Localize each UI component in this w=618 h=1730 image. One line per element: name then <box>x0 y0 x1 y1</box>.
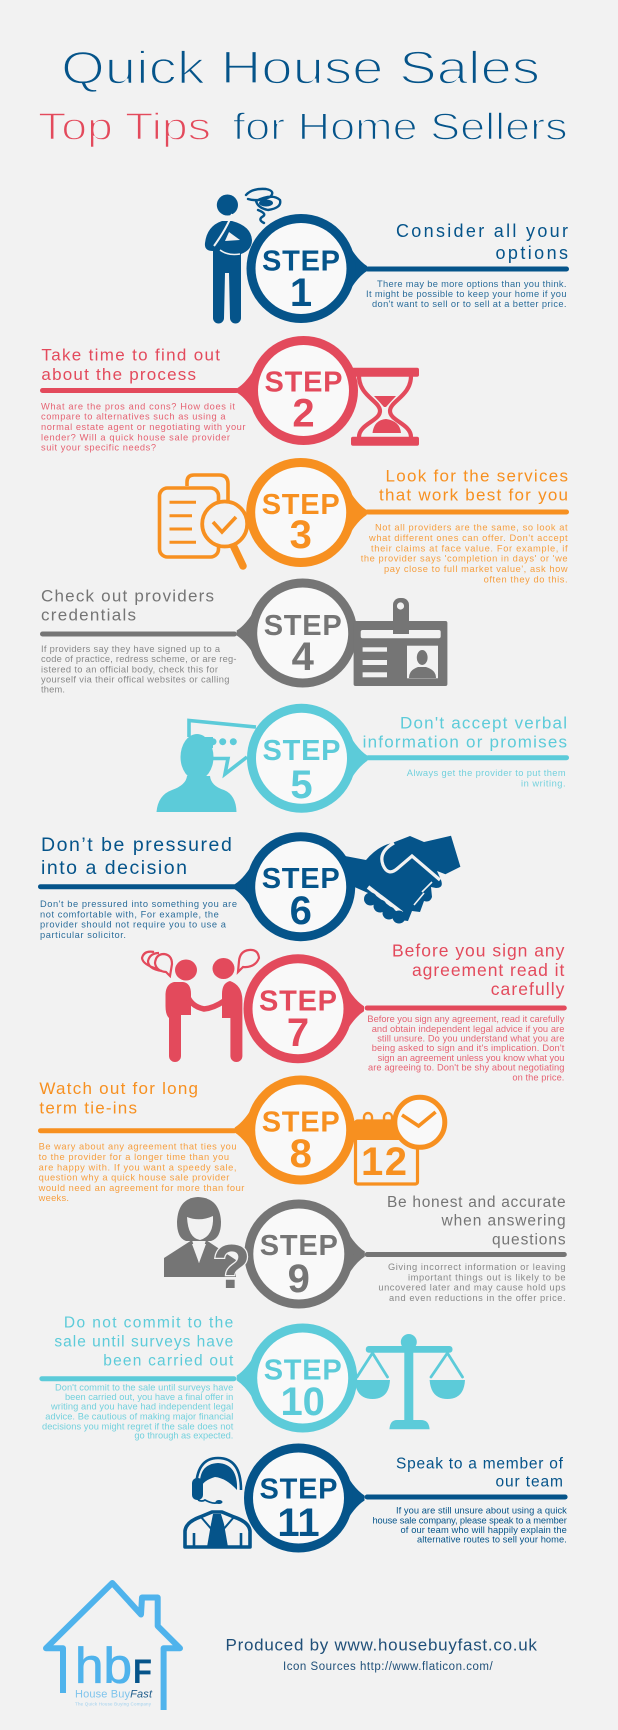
title line 2: for Home Sellers <box>233 106 568 148</box>
step 10 badge: STEP <box>264 1354 342 1386</box>
step 7 heading <box>392 941 565 999</box>
step 9 body: important things out is likely to be <box>408 1272 566 1282</box>
step 4 heading: Check out providers <box>41 587 214 606</box>
step 5 heading <box>363 713 567 752</box>
step 11 body: If you are still unsure about using a quick <box>396 1506 567 1516</box>
step 11 body: of our team who will happily explain the <box>400 1525 567 1535</box>
logo house outline <box>46 1583 180 1710</box>
step 2 heading: about the process <box>41 365 196 384</box>
step 8 body: to the provider for a longer time than you <box>39 1152 229 1162</box>
step 8 badge <box>38 1076 355 1184</box>
logo letters hbF: hb <box>75 1638 132 1694</box>
step 10 body: advice. Be cautious of making major financial <box>45 1411 233 1421</box>
step 8 panel <box>38 1076 445 1203</box>
icon: thinking person <box>205 189 280 324</box>
step 11 heading: Speak to a member of <box>396 1455 564 1472</box>
step 7 badge: STEP <box>259 986 337 1018</box>
step 3 body: pay close to full market value', ask how <box>384 564 568 574</box>
step 6 badge: 6 <box>290 889 312 933</box>
step 7 heading: agreement read it <box>412 960 565 980</box>
step 9 heading <box>387 1194 566 1248</box>
icon: two people talking <box>142 950 259 1062</box>
step 1 heading: options <box>496 243 568 263</box>
step 7 body: still unsure. Do you understand what you are <box>377 1033 564 1043</box>
footer credits <box>226 1636 537 1673</box>
step 3 body: often they do this. <box>484 574 568 584</box>
step 3 body: the provider says 'completion in days' or 'we <box>361 554 568 564</box>
step 7 body: are agreeing to. Don't be shy about negotiating <box>368 1062 564 1072</box>
step 10 badge <box>39 1324 357 1432</box>
step 7 body: being asked to sign and it's implication. Don't <box>372 1043 565 1053</box>
step 6 panel <box>38 832 460 941</box>
step 5 body <box>407 768 566 789</box>
step 2 body: lender? Will a quick house sale provider <box>41 432 230 442</box>
title line 2 <box>38 106 568 148</box>
step 9 badge <box>244 1200 567 1308</box>
step 8 body: question why a quick house sale provider <box>39 1173 229 1183</box>
step 2 heading: Take time to find out <box>41 346 220 365</box>
step 6 heading: into a decision <box>41 857 187 879</box>
step 1 badge <box>246 214 569 323</box>
step 8 heading: Watch out for long <box>39 1079 198 1098</box>
step 10 body: decisions you might regret if the sale does not <box>42 1421 234 1431</box>
icon: woman with question mark <box>164 1197 250 1302</box>
step 1 heading: Consider all your <box>396 221 568 241</box>
step 6 heading: Don’t be pressured <box>41 834 232 856</box>
step 3 heading <box>379 467 568 505</box>
step 3 badge: STEP <box>262 489 340 521</box>
step 2 body: What are the pros and cons? How does it <box>41 401 235 411</box>
step 4 body: istered to an official body, check this for <box>41 664 218 674</box>
step 5 badge: 5 <box>290 763 313 807</box>
step 11 badge: STEP <box>260 1474 338 1506</box>
step 7 body: Before you sign any agreement, read it carefully <box>367 1014 565 1024</box>
step 7 badge <box>244 954 567 1063</box>
step 4 heading: credentials <box>41 606 136 625</box>
icon: ID badge <box>354 598 447 686</box>
step 1 badge: STEP <box>262 246 340 278</box>
step 6 body: provider should not require you to use a <box>40 920 227 930</box>
icon: calendar and clock: 12 <box>361 1140 407 1184</box>
icon: call centre agent <box>185 1458 250 1547</box>
icon: woman with question mark: ? <box>213 1233 250 1302</box>
step 4 body: code of practice, redress scheme, or are reg- <box>41 654 236 664</box>
step 9 heading: Be honest and accurate <box>387 1194 566 1211</box>
step 8 body: Be wary about any agreement that ties you <box>39 1142 236 1152</box>
step 2 body: suit your specific needs? <box>41 443 156 453</box>
step 8 badge: 8 <box>290 1132 312 1176</box>
step 11 badge <box>244 1444 568 1552</box>
step 9 heading: when answering <box>440 1213 566 1230</box>
step 11 heading: our team <box>496 1474 563 1491</box>
step 3 body: Not all providers are the same, so look at <box>375 523 568 533</box>
step 2 badge <box>40 336 358 445</box>
icon: calendar and clock <box>354 1097 445 1184</box>
step 9 body <box>378 1262 566 1303</box>
step 10 heading: Do not commit to the <box>64 1315 233 1332</box>
step 3 badge: 3 <box>290 513 312 557</box>
step 10 body: Don't commit to the sale until surveys have <box>55 1382 233 1392</box>
title line 2: Top Tips <box>38 106 211 148</box>
step 8 body: weeks. <box>38 1193 69 1203</box>
step 6 body: Don't be pressured into something you are <box>40 899 237 909</box>
step 5 body: in writing. <box>521 779 566 789</box>
step 8 body: would need an agreement for more than four <box>38 1183 244 1193</box>
step 3 heading: that work best for you <box>379 486 568 505</box>
step 7 body: and obtain independent legal advice if you are <box>372 1024 564 1034</box>
icon: person with speech bubble <box>156 720 256 812</box>
step 4 badge: STEP <box>264 610 342 642</box>
step 8 heading <box>39 1079 198 1117</box>
step 11 body: house sale company, please speak to a member <box>372 1515 567 1525</box>
step 6 badge: STEP <box>262 863 340 895</box>
step 11 body: alternative routes to sell your home. <box>417 1535 567 1545</box>
produced by line: Produced by www.housebuyfast.co.uk <box>226 1636 537 1655</box>
step 11 panel <box>185 1444 568 1552</box>
step 7 body <box>367 1014 565 1082</box>
logo letters hbF: F <box>133 1653 152 1691</box>
step 10 heading: sale until surveys have <box>54 1333 233 1350</box>
step 1 badge: 1 <box>290 271 312 315</box>
step 3 body: their claims at face value. For example, if <box>371 543 568 553</box>
step 3 body: what different ones can offer. Don't accept <box>368 533 568 543</box>
step 10 body: been carried out, you have a final offer in <box>65 1392 233 1402</box>
title <box>38 41 568 148</box>
step 5 badge: STEP <box>262 735 340 767</box>
step 6 body: particular solicitor. <box>40 930 126 940</box>
step 10 body: go through as expected. <box>134 1431 233 1441</box>
step 7 body: on the price. <box>512 1072 564 1082</box>
step 8 body <box>38 1142 244 1203</box>
logo: House Buy Fast <box>46 1583 180 1710</box>
step 10 heading <box>54 1315 234 1369</box>
step 6 body: not comfortable with, For example, the <box>40 909 219 919</box>
step 10 panel <box>39 1315 465 1441</box>
step 4 badge: 4 <box>292 635 315 679</box>
step 5 heading: Don't accept verbal <box>400 713 567 732</box>
step 7 panel <box>142 941 567 1082</box>
step 5 badge <box>247 704 569 813</box>
step 7 heading: Before you sign any <box>392 941 565 961</box>
step 7 body: sign an agreement unless you know what you <box>378 1053 564 1063</box>
step 3 panel <box>160 458 569 584</box>
step 2 badge: 2 <box>292 392 315 436</box>
step 8 badge: STEP <box>262 1106 340 1138</box>
step 9 panel <box>164 1194 567 1308</box>
step 9 body: Giving incorrect information or leaving <box>388 1262 566 1272</box>
step 5 panel <box>156 704 569 813</box>
step 2 heading <box>41 346 220 384</box>
step 3 body <box>361 523 568 584</box>
step 1 body: There may be more options than you think. <box>377 279 566 289</box>
step 4 heading <box>41 587 214 625</box>
step 10 badge: 10 <box>280 1380 325 1424</box>
step 11 body <box>372 1506 567 1545</box>
step 3 heading: Look for the services <box>386 467 568 486</box>
step 4 body: If providers say they have signed up to a <box>41 644 221 654</box>
step 11 heading <box>396 1455 564 1491</box>
step 3 badge <box>246 458 569 567</box>
step 5 heading: information or promises <box>363 733 567 752</box>
step 6 badge <box>38 832 355 941</box>
step 10 body: writing and you have had independent legal <box>50 1402 233 1412</box>
step 9 heading: questions <box>492 1231 566 1248</box>
step 2 body: normal estate agent or negotiating with your <box>41 422 246 432</box>
logo tagline: The Quick House Buying Company <box>75 1702 152 1707</box>
step 7 badge: 7 <box>287 1011 309 1055</box>
step 4 body <box>41 644 236 695</box>
step 6 body <box>40 899 237 940</box>
step 9 body: uncovered later and may cause hold ups <box>378 1283 566 1293</box>
step 2 body <box>41 401 246 453</box>
step 6 heading <box>41 834 232 879</box>
step 1 body: don't want to sell or to sell at a better price. <box>372 299 566 309</box>
icon: hourglass <box>351 368 419 446</box>
step 4 body: yourself via their offical websites or calling <box>41 675 229 685</box>
icon sources line: Icon Sources http://www.flaticon.com/ <box>283 1661 493 1673</box>
step 1 body <box>366 279 566 309</box>
icon: documents with magnifier <box>160 475 247 566</box>
title line 1: Quick House Sales <box>61 41 540 93</box>
step 2 body: compare to alternatives such as using a <box>41 412 226 422</box>
step 2 badge: STEP <box>264 366 342 398</box>
step 2 panel <box>40 336 419 453</box>
logo wordmark: House BuyFast <box>75 1688 153 1700</box>
step 1 heading <box>396 221 568 263</box>
step 9 badge: 9 <box>288 1257 310 1301</box>
step 10 heading: been carried out <box>103 1352 234 1369</box>
step 9 badge: STEP <box>260 1230 338 1262</box>
step 4 badge <box>40 578 357 688</box>
step 1 body: It might be possible to keep your home if you <box>366 289 566 299</box>
step 4 body: them. <box>41 685 65 695</box>
step 1 panel <box>205 189 569 324</box>
step 8 heading: term tie-ins <box>39 1098 137 1117</box>
step 4 panel <box>40 578 447 695</box>
step 11 badge: 11 <box>277 1501 320 1545</box>
step 5 body: Always get the provider to put them <box>407 768 566 778</box>
step 7 heading: carefully <box>491 979 565 999</box>
icon: handshake <box>345 836 460 924</box>
step 10 body <box>42 1382 234 1441</box>
step 9 body: and even reductions in the offer price. <box>389 1293 566 1303</box>
step 8 body: are happy with. If you want a speedy sale, <box>39 1162 236 1172</box>
icon: balance scales <box>355 1334 465 1429</box>
